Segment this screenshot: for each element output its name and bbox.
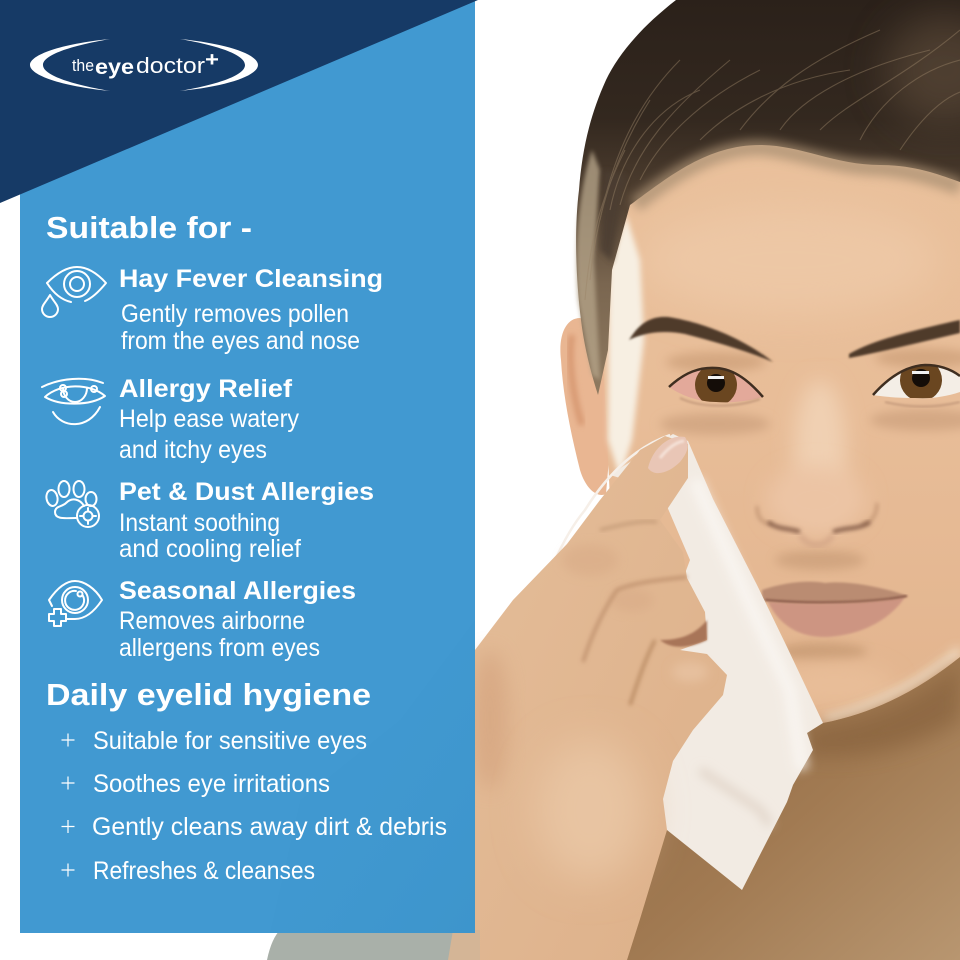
item: pet and dust allergies [119, 478, 374, 563]
icon: eye with tear drop [42, 267, 106, 317]
icon: paw with allergen [45, 481, 99, 527]
shirt strip below panel [267, 930, 475, 960]
item: seasonal allergies: allergens from eyes [119, 634, 320, 662]
left eyebrow [629, 317, 773, 362]
logo swoosh left [30, 39, 110, 91]
item: allergy relief [119, 375, 299, 464]
item: hay fever cleansing: from the eyes and nose [121, 327, 360, 355]
logo wordmark [72, 49, 219, 79]
item: allergy relief: Allergy Relief [119, 375, 293, 403]
shadow under jaw [800, 662, 960, 756]
item: hay fever cleansing: Gently removes pollen [121, 300, 349, 328]
wipe edge along hand [524, 435, 670, 654]
logo [30, 39, 258, 91]
hand back light [535, 740, 645, 880]
finger volumes [562, 544, 618, 576]
item: pet and dust allergies: Instant soothing [119, 509, 280, 537]
white wipe [524, 434, 823, 890]
logo wordmark: + [205, 49, 219, 71]
blue panel [20, 0, 475, 933]
heading: daily eyelid hygiene: Daily eyelid hygiene [46, 677, 371, 712]
logo wordmark: eye [95, 56, 134, 79]
item: allergy relief: and itchy eyes [119, 436, 267, 464]
nose [757, 466, 877, 545]
benefit list [62, 727, 447, 885]
logo wordmark: doctor [136, 53, 205, 78]
hand side shade [472, 650, 508, 790]
palm and wrist [475, 436, 727, 960]
panel translucent shade [270, 620, 475, 933]
item: hay fever cleansing [119, 265, 383, 355]
face skin [598, 100, 960, 723]
left eye [668, 366, 764, 408]
skin below panel [448, 930, 480, 960]
logo wordmark: the [72, 56, 94, 75]
item: pet and dust allergies: Pet & Dust Allergies [119, 478, 374, 506]
icon: eye with medical cross [49, 581, 102, 626]
lit temple edge [608, 215, 644, 478]
right eyebrow [849, 320, 960, 358]
benefit: soothes: Soothes eye irritations [93, 770, 330, 798]
hair [576, 0, 960, 395]
logo swoosh right [180, 39, 258, 91]
benefit: refreshes: Refreshes & cleanses [93, 857, 315, 885]
ear shading [570, 335, 582, 425]
navy banner [0, 0, 478, 203]
item: seasonal allergies: Removes airborne [119, 607, 305, 635]
benefit: sensitive eyes: Suitable for sensitive eyes [93, 727, 367, 755]
neck [600, 640, 960, 960]
item: pet and dust allergies: and cooling relief [119, 535, 301, 563]
dark under finger [660, 620, 707, 647]
cheek and nose shading [660, 348, 960, 720]
forehead light [640, 205, 940, 315]
hand [472, 436, 727, 960]
hair side dark band [600, 170, 626, 262]
hair strands [585, 30, 960, 300]
ear [560, 318, 620, 495]
hair top right tone [885, 15, 960, 125]
photo: woman wiping her face [267, 0, 960, 960]
right eye [872, 364, 960, 408]
item: seasonal allergies [119, 577, 356, 662]
benefit: gently cleans: Gently cleans away dirt & debris [92, 813, 447, 841]
hair side light band [577, 150, 600, 380]
lips [762, 582, 908, 637]
fingernail [648, 437, 688, 473]
item: allergy relief: Help ease watery [119, 405, 299, 433]
item: hay fever cleansing: Hay Fever Cleansing [119, 265, 383, 293]
icon: allergy eye [42, 379, 105, 424]
item: seasonal allergies: Seasonal Allergies [119, 577, 356, 605]
hairline fade [635, 148, 960, 205]
heading: suitable for: Suitable for - [46, 210, 252, 245]
finger joints [600, 522, 657, 530]
